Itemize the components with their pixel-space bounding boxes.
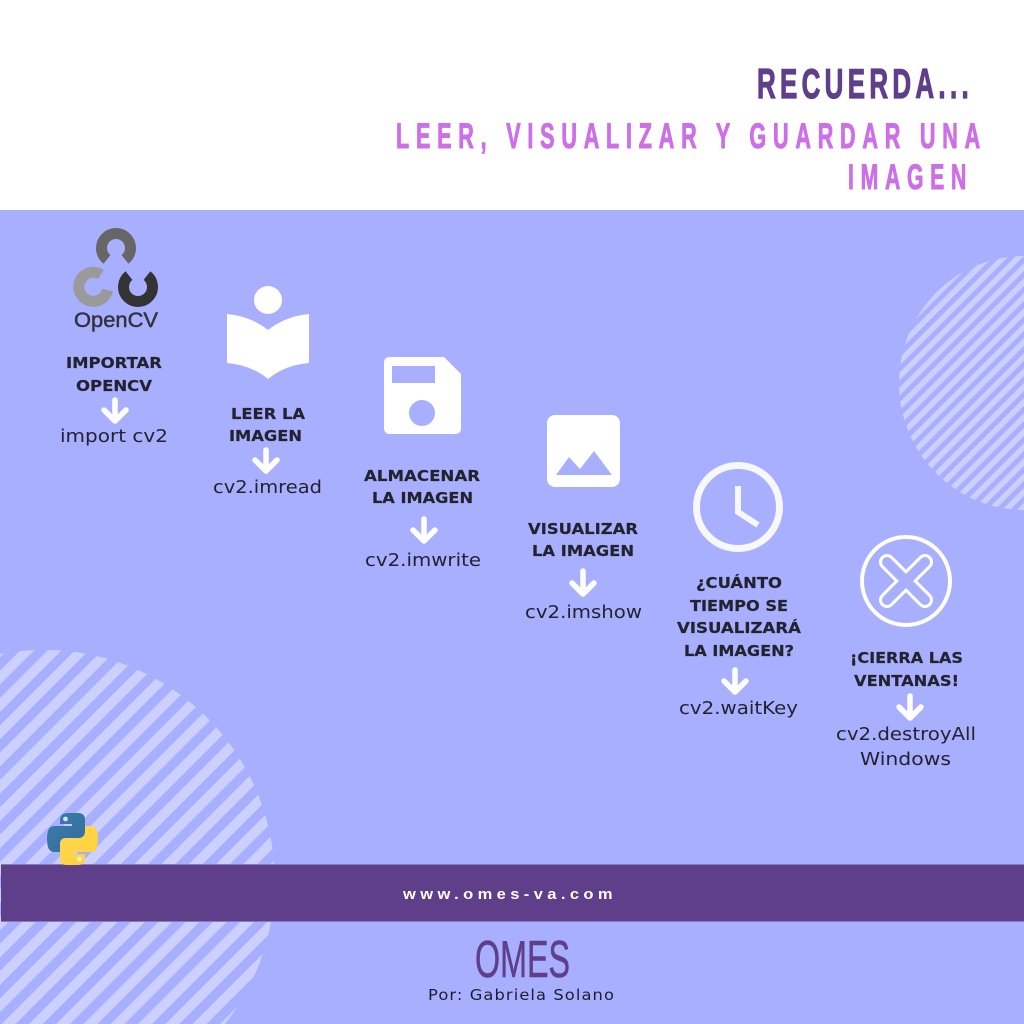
step 3 heading: [364, 467, 480, 507]
step 6: cierra las ventanas: [836, 537, 976, 770]
step 6 heading: [850, 649, 963, 690]
brand name: OMES: [475, 931, 570, 989]
icon: open book reader: [227, 286, 309, 379]
arrow: [255, 450, 277, 471]
step 6 code: Windows: [860, 749, 951, 770]
step 2: leer la imagen: [213, 286, 322, 498]
step 1 heading: [66, 354, 162, 395]
header panel: [0, 0, 1024, 210]
step 4 heading: VISUALIZAR: [528, 520, 638, 538]
arrow: [572, 571, 594, 594]
icon: clock: [696, 466, 780, 548]
main background panel: [0, 210, 1024, 1024]
arrow: [104, 400, 126, 421]
icon: floppy disk: [384, 357, 461, 434]
step 3 code: cv2.imwrite: [365, 550, 481, 571]
step 6 code: [836, 724, 976, 770]
footer bar: [1, 864, 1024, 922]
step 1 heading: OPENCV: [76, 377, 152, 395]
step 4 heading: [528, 520, 638, 560]
decorative striped circle: bottom left: [0, 650, 275, 1024]
subtitle: [396, 117, 987, 197]
step 6 heading: ¡CIERRA LAS: [850, 649, 963, 667]
step 5 heading: VISUALIZARÁ: [677, 618, 801, 637]
icon: OpenCV logo: OpenCV: [74, 309, 158, 332]
icon: close circle: [862, 537, 950, 625]
step 5 heading: LA IMAGEN?: [684, 642, 794, 660]
step 3: almacenar la imagen: [364, 357, 481, 571]
arrow: [899, 696, 921, 718]
step 1 heading: IMPORTAR: [66, 354, 162, 372]
website url: www.omes-va.com: [402, 886, 617, 903]
step 4: visualizar la imagen: [525, 415, 642, 623]
step 3 heading: ALMACENAR: [364, 467, 480, 485]
step 1 code: import cv2: [60, 426, 168, 447]
step 1: importar OpenCV: [60, 234, 168, 447]
step 2 code: cv2.imread: [213, 477, 322, 498]
icon: Python logo: [47, 813, 98, 865]
step 5 heading: ¿CUÁNTO: [696, 573, 782, 592]
step 2 heading: LEER LA: [231, 405, 305, 423]
step 4 heading: LA IMAGEN: [532, 542, 634, 560]
step 5 code: cv2.waitKey: [679, 698, 798, 719]
step 2 heading: [229, 405, 305, 445]
step 6 heading: VENTANAS!: [854, 672, 959, 690]
step 2 heading: IMAGEN: [229, 427, 302, 445]
icon: picture: [547, 415, 620, 487]
step 5 heading: TIEMPO SE: [690, 597, 788, 615]
arrow: [724, 670, 746, 692]
step 5: tiempo de visualización: [677, 466, 801, 719]
step 3 heading: LA IMAGEN: [372, 489, 473, 507]
decorative striped circle: top right: [899, 256, 1024, 510]
step 6 code: cv2.destroyAll: [836, 724, 976, 745]
arrow: [413, 519, 435, 541]
icon: OpenCV logo: [74, 234, 158, 332]
step 4 code: cv2.imshow: [525, 602, 642, 623]
step 5 heading: [677, 573, 801, 660]
author credit: Por: Gabriela Solano: [428, 986, 615, 1004]
